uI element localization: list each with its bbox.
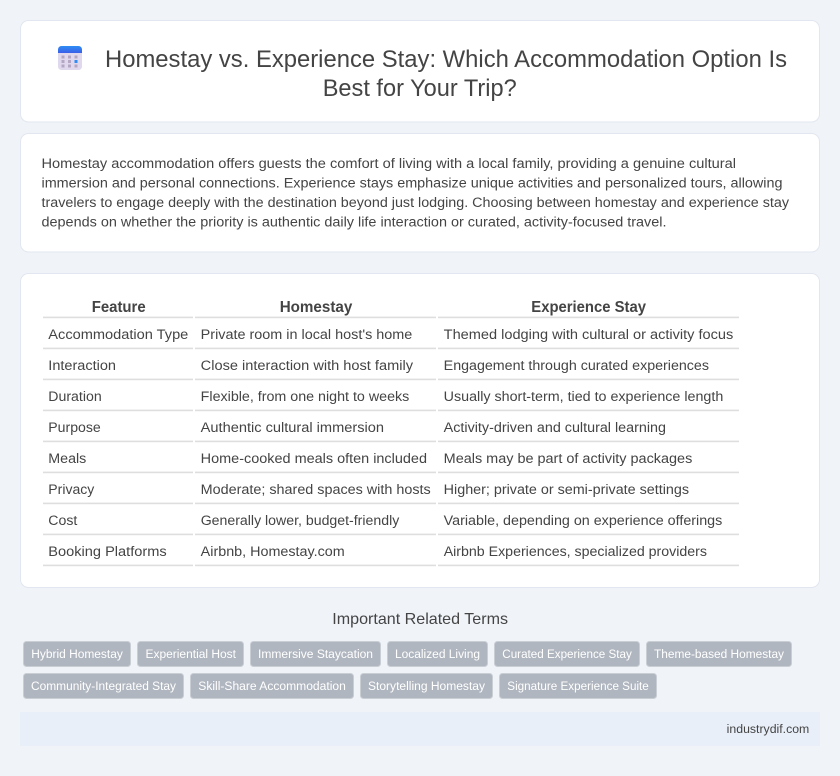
tag: theme-based homestay (646, 642, 792, 666)
row: duration: Usually short-term, tied to experience length (444, 389, 723, 405)
footer bar (20, 712, 820, 746)
title: Best for Your Trip? (323, 76, 517, 102)
tag: skill-share accommodation: Skill-Share Accommodation (198, 679, 346, 693)
panel: comparison table (20, 274, 820, 588)
row: cost: Variable, depending on experience offerings (444, 513, 722, 529)
footer source text: industrydif.com (727, 722, 809, 736)
row: booking platforms: Airbnb, Homestay.com (201, 544, 345, 560)
row: privacy (48, 482, 689, 498)
title (105, 47, 787, 102)
table header row: Feature (92, 299, 146, 316)
row: privacy: Privacy (48, 482, 95, 498)
row: duration: Duration (48, 389, 102, 405)
row: cost: Generally lower, budget-friendly (201, 513, 400, 529)
panel: header (20, 20, 820, 122)
text block: introduction paragraph: travelers to engage deeply with the destination beyond just lodging. Choosing between homestay and experience stay (42, 195, 790, 211)
row: cost: Cost (48, 513, 77, 529)
tag: community-integrated stay (24, 674, 184, 698)
row: accommodation type: Accommodation Type (48, 327, 188, 343)
tag: immersive staycation: Immersive Staycation (258, 647, 373, 661)
tag: localized living (388, 642, 488, 666)
text block: introduction paragraph: immersion and personal connections. Experience stays emphasize unique activities and personalized tours, allowing (42, 176, 782, 192)
row: purpose: Purpose (48, 420, 101, 436)
row: interaction: Close interaction with host family (201, 358, 414, 374)
row: booking platforms: Airbnb Experiences, specialized providers (444, 544, 707, 560)
tag: immersive staycation (250, 642, 380, 666)
row: purpose (48, 420, 666, 436)
row: purpose: Activity-driven and cultural learning (444, 420, 666, 436)
tag: curated experience stay (494, 642, 640, 666)
row: accommodation type: Themed lodging with cultural or activity focus (444, 327, 733, 343)
tag: curated experience stay: Curated Experience Stay (502, 647, 633, 661)
tag: experiential host (138, 642, 244, 666)
row: accommodation type (48, 327, 733, 343)
row: interaction (48, 358, 709, 374)
row: cost (48, 513, 722, 529)
related term tags (24, 642, 792, 698)
tag: theme-based homestay: Theme-based Homestay (654, 647, 785, 661)
row: privacy: Higher; private or semi-private settings (444, 482, 689, 498)
table header row: Homestay (280, 299, 353, 316)
row: accommodation type: Private room in local host's home (201, 327, 412, 343)
row: meals: Home-cooked meals often included (201, 451, 427, 467)
tag: hybrid homestay: Hybrid Homestay (31, 647, 124, 661)
text block: introduction paragraph (42, 156, 790, 230)
row: booking platforms: Booking Platforms (48, 544, 167, 560)
row: duration (48, 389, 723, 405)
row: meals (48, 451, 692, 467)
tag: experiential host: Experiential Host (146, 647, 237, 661)
row: interaction: Engagement through curated experiences (444, 358, 709, 374)
text block: introduction paragraph: Homestay accommodation offers guests the comfort of living with a local family, providing a genuine cultural (42, 156, 736, 172)
icon: calendar (58, 46, 82, 70)
text block: introduction paragraph: depends on whether the priority is authentic daily life interaction or curated, activity-focused travel. (42, 214, 666, 230)
tag: signature experience suite (500, 674, 656, 698)
tag: storytelling homestay (360, 674, 492, 698)
tag: localized living: Localized Living (395, 647, 480, 661)
panel: introduction (20, 134, 820, 252)
row: meals: Meals may be part of activity packages (444, 451, 692, 467)
row: purpose: Authentic cultural immersion (201, 420, 384, 436)
row: booking platforms (48, 544, 707, 560)
tag: skill-share accommodation (190, 674, 354, 698)
row: duration: Flexible, from one night to weeks (201, 389, 409, 405)
title: Homestay vs. Experience Stay: Which Accommodation Option Is (105, 47, 787, 73)
row: privacy: Moderate; shared spaces with hosts (201, 482, 431, 498)
tag: hybrid homestay (24, 642, 130, 666)
tag: signature experience suite: Signature Experience Suite (507, 679, 649, 693)
table header row: Experience Stay (531, 299, 646, 316)
row: meals: Meals (48, 451, 86, 467)
table header row (92, 299, 646, 316)
heading: important related terms: Important Related Terms (332, 611, 508, 628)
row: interaction: Interaction (48, 358, 116, 374)
tag: storytelling homestay: Storytelling Homestay (368, 679, 486, 693)
tag: community-integrated stay: Community-Integrated Stay (31, 679, 177, 693)
